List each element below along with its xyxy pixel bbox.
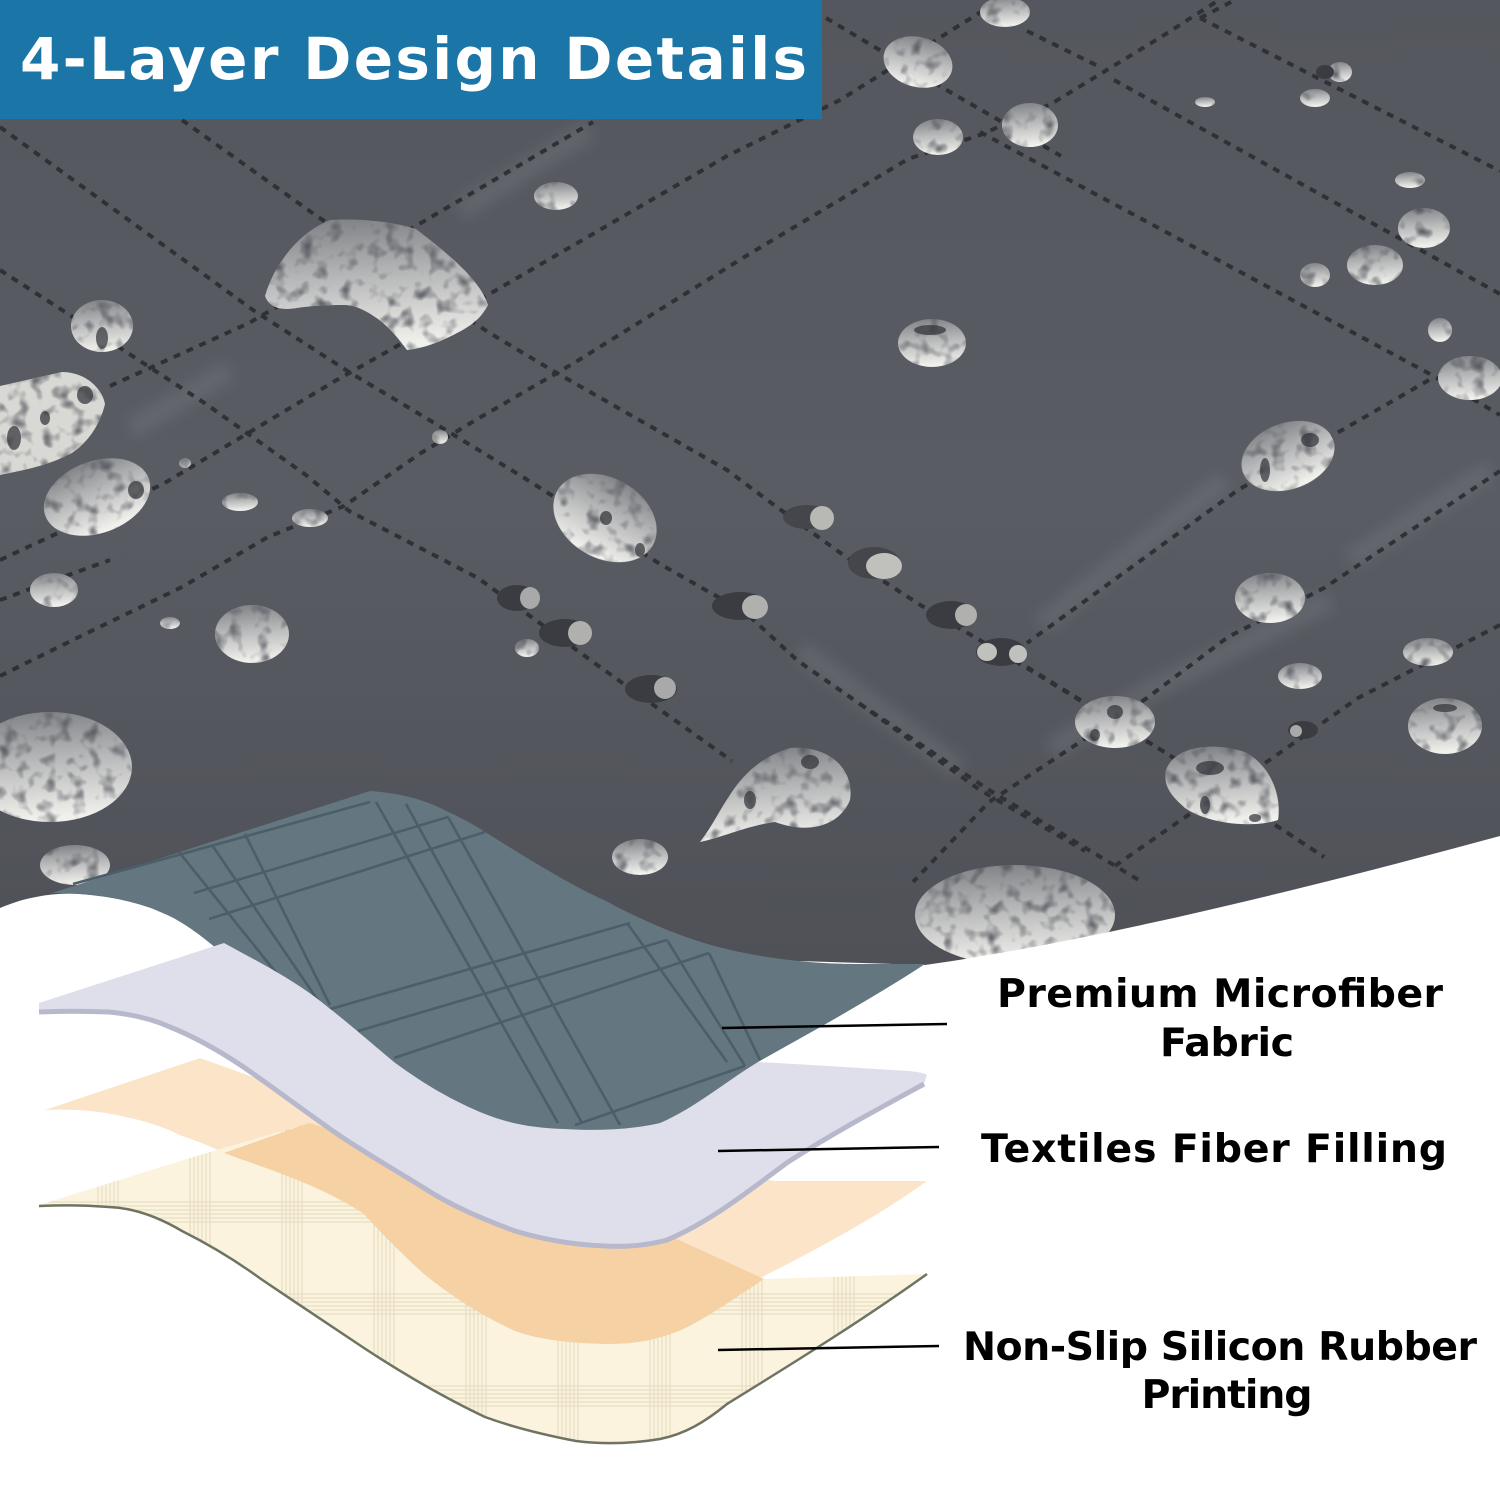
leader line: rubber printing [718,1346,939,1350]
droplet speckles [7,325,1457,822]
quilt puffing highlights [130,130,1490,770]
title: 4-Layer Design Details [20,25,807,93]
label: non-slip silicon rubber: Non-Slip Silicon Rubber [963,1324,1478,1370]
orange overlap over the printing [224,1123,764,1344]
panel: white wave base [0,836,1500,1500]
small dark droplet clusters [497,65,1334,739]
leader line: microfiber [722,1024,947,1028]
layer 3: orange filling light [45,1058,927,1344]
label: printing: Printing [1142,1372,1312,1418]
label: textiles fiber filling: Textiles Fiber Filling [981,1126,1447,1172]
layer 4: silicone rubber printing [39,1123,927,1443]
layer 2: fiber filling [39,943,927,1246]
panel: quilted fabric background [0,0,1500,1000]
title banner [0,0,822,119]
label: fabric second line: Fabric [1160,1020,1294,1066]
quilting stitch lines [0,0,1500,882]
water droplets [0,0,1500,965]
panel: layer stack [39,791,927,1443]
label: microfiber fabric: Premium Microfiber [997,971,1444,1017]
leader line: filling [718,1147,939,1151]
layer 1: microfiber fabric [52,791,925,1150]
